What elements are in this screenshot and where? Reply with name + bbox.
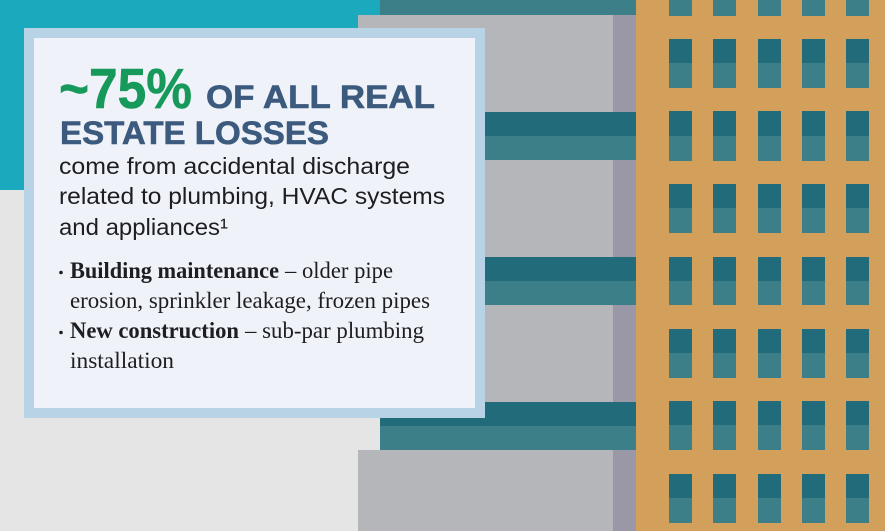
bullet: new construction: New construction [70,318,239,343]
heading: 75 percent of all real estate losses: ~75% [59,57,192,121]
bullet: new construction: installation [70,348,174,373]
background: teal sky block [0,0,380,190]
text block: accidental discharge description [59,153,445,240]
bullet: building maintenance [59,258,430,313]
bullet: building maintenance: Building maintenance [70,258,279,283]
building: balcony band 3 [380,402,636,450]
bullet: new construction [59,318,424,373]
building: balcony band 1 [380,112,636,160]
text block: accidental discharge description: and appliances¹ [59,214,228,240]
bullet: new construction: – sub-par plumbing [244,318,424,343]
heading: 75 percent of all real estate losses [59,57,435,151]
bullet: building maintenance: – older pipe [284,258,393,283]
bullet list: loss sources [59,258,430,373]
text block: accidental discharge description: come from accidental discharge [59,153,410,179]
heading: 75 percent of all real estate losses: OF ALL REAL [206,79,435,115]
building: balcony band 2 [380,257,636,305]
heading: 75 percent of all real estate losses: ESTATE LOSSES [60,115,329,151]
building: orange tower with windows [636,0,885,531]
bullet: building maintenance: erosion, sprinkler leakage, frozen pipes [70,288,430,313]
panel: statistic card [24,28,485,418]
building: grey side wing [358,0,636,531]
text block: accidental discharge description: related to plumbing, HVAC systems [59,183,445,209]
